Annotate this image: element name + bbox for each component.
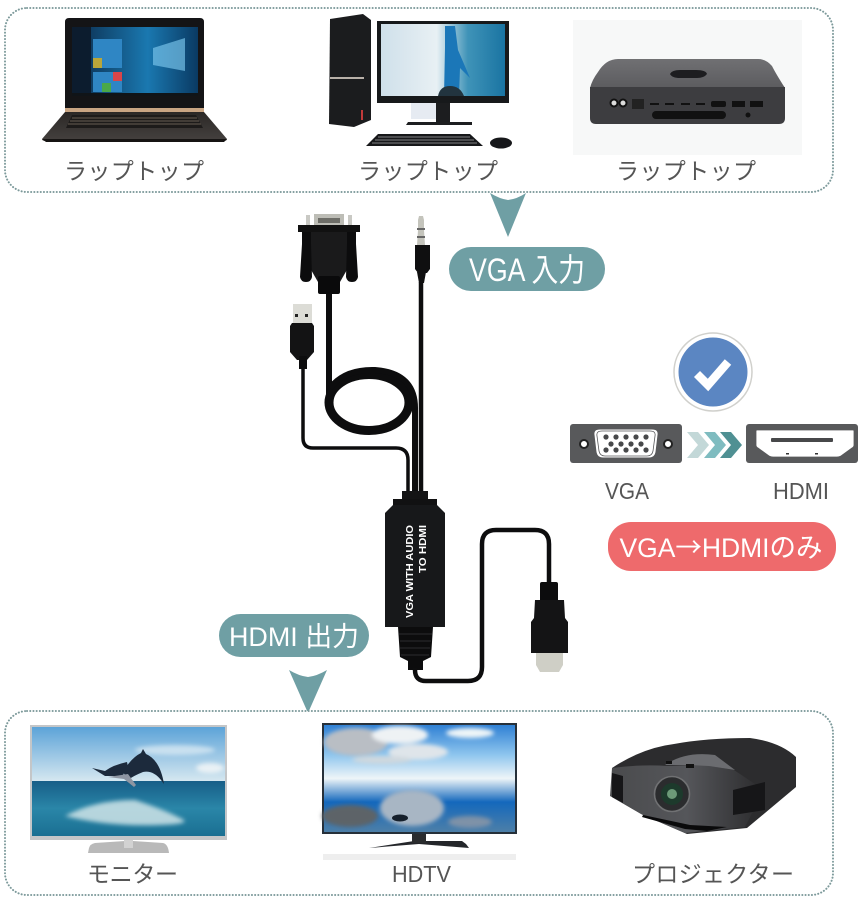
panel: output devices xyxy=(5,711,833,895)
audio jack xyxy=(415,216,430,283)
label: laptop 1: ラップトップ xyxy=(64,158,204,184)
panel border bottom xyxy=(5,711,833,895)
VGA plug xyxy=(298,214,360,294)
adapter cable xyxy=(290,214,568,681)
pill: HDMI output: HDMI 出力 xyxy=(229,622,359,652)
label: projector: プロジェクター xyxy=(632,861,794,887)
label: laptop 2: ラップトップ xyxy=(358,158,498,184)
laptop photo xyxy=(42,18,227,142)
desktop computer photo xyxy=(329,14,512,148)
label: laptop 3: ラップトップ xyxy=(616,158,756,184)
label: VGA: VGA xyxy=(605,478,650,504)
USB plug xyxy=(290,304,314,369)
converter box xyxy=(385,491,445,670)
panel: input devices xyxy=(5,8,833,192)
pill: VGA input: VGA 入力 xyxy=(469,252,585,288)
projector photo xyxy=(610,738,796,834)
badge: check mark xyxy=(674,333,752,411)
HDTV photo xyxy=(322,723,517,860)
panel border top xyxy=(5,8,833,192)
monitor photo xyxy=(30,725,227,853)
icon: VGA port xyxy=(570,424,682,463)
pill: HDMI output xyxy=(219,614,369,657)
HDMI cable xyxy=(415,530,549,681)
icon: HDMI port xyxy=(746,424,858,463)
box text line 1: VGA WITH AUDIO xyxy=(404,525,416,618)
arrow: chevrons VGA to HDMI xyxy=(687,432,742,458)
pill: VGA to HDMI only: VGA→HDMIのみ xyxy=(620,526,822,565)
label: HDMI: HDMI xyxy=(773,478,829,504)
arrow: to output devices xyxy=(289,670,327,713)
label: monitor: モニター xyxy=(87,861,178,887)
label: HDTV: HDTV xyxy=(392,861,452,887)
box text line 2: TO HDMI xyxy=(417,525,429,573)
mac mini photo xyxy=(573,20,802,155)
HDMI plug xyxy=(531,582,568,672)
cables and loop xyxy=(303,282,421,495)
arrow: into VGA input xyxy=(490,193,526,237)
